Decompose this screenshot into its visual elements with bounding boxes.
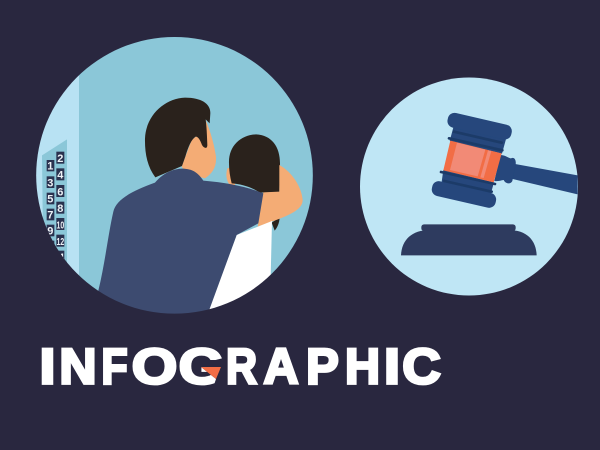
- elevator button panel: 9: [47, 226, 53, 238]
- elevator button panel: [42, 139, 67, 270]
- woman hair lower tip: [272, 217, 280, 231]
- elevator button panel: 12: [56, 237, 64, 248]
- rings: [441, 132, 502, 192]
- circle background: [360, 78, 578, 296]
- panel: gavel circle: [360, 78, 578, 296]
- band highlight: [450, 143, 485, 176]
- woman hair: [229, 134, 280, 193]
- panel: elevator couple circle: [30, 30, 320, 323]
- upper neck: [450, 125, 507, 154]
- title: N: [59, 338, 97, 394]
- elevator button panel: 4: [59, 253, 65, 264]
- elevator button panel: 1: [49, 243, 55, 254]
- title: O: [132, 338, 177, 395]
- elevator button panel: 3: [47, 177, 53, 189]
- title wedge accent in G: [199, 360, 226, 391]
- title: A: [263, 339, 299, 395]
- title: I: [40, 339, 55, 395]
- man face: [182, 119, 216, 178]
- man hair: [145, 98, 210, 177]
- title: [40, 338, 441, 395]
- elevator button panel: 5: [47, 194, 53, 206]
- band stripe: [480, 150, 491, 178]
- elevator button panel: 8: [57, 203, 63, 215]
- title: G: [179, 338, 224, 395]
- sound block: [401, 224, 537, 255]
- elevator door frame: [36, 76, 79, 276]
- elevator button panel: 7: [47, 210, 53, 222]
- elevator button panel: 10: [56, 220, 64, 231]
- man arm: [258, 165, 303, 227]
- block base: [401, 230, 537, 255]
- title: I: [384, 339, 400, 395]
- handle collar: [494, 155, 516, 183]
- title: P: [306, 339, 339, 395]
- elevator button panel: 4: [57, 170, 64, 182]
- elevator button panel: 2: [57, 153, 63, 165]
- title: F: [101, 338, 128, 394]
- title: R: [226, 338, 257, 394]
- orange band: [443, 141, 502, 182]
- bottom cap: [430, 180, 497, 209]
- lower neck: [441, 170, 494, 197]
- elevator button panel: 1: [47, 161, 53, 173]
- woman skin behind hair: [226, 167, 235, 185]
- title: C: [402, 338, 441, 394]
- gavel handle: [510, 163, 578, 194]
- block top: [421, 224, 516, 231]
- woman white shirt: [208, 221, 272, 311]
- top cap: [446, 112, 513, 141]
- elevator wall: [79, 37, 313, 291]
- elevator button panel: 6: [57, 186, 63, 198]
- title: H: [345, 339, 380, 395]
- gavel: [430, 112, 578, 209]
- man shirt: [98, 169, 263, 323]
